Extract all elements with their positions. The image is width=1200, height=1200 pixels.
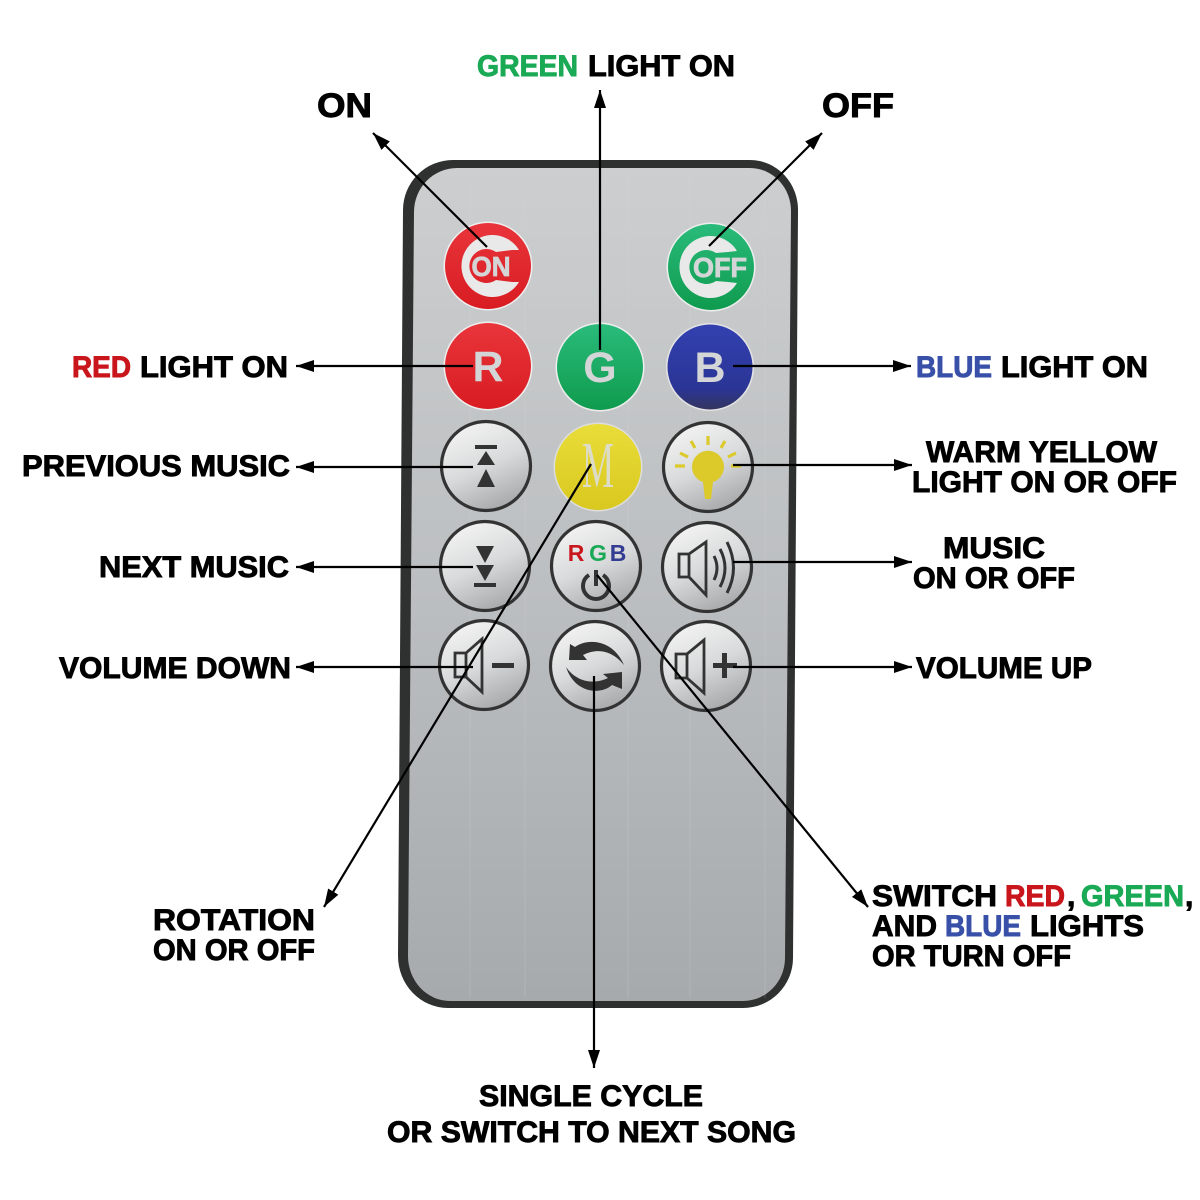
button: RGB power: G [589,540,607,566]
arrow: off [709,133,822,246]
label: green light on [477,50,735,83]
label: off: OFF [822,87,894,125]
label: switch rgb lights: GREEN [1081,880,1184,913]
label: music on or off: MUSIC [943,532,1045,565]
label: music on or off [913,532,1075,595]
label: single cycle [387,1080,796,1149]
label: red light on: LIGHT ON [140,351,288,384]
label: previous music: PREVIOUS MUSIC [22,450,290,483]
label: warm yellow light: LIGHT ON OR OFF [912,466,1177,499]
label: green light on: GREEN [477,50,578,83]
button: ON: ON [472,251,510,282]
button: single cycle [550,622,640,710]
label: switch rgb lights: BLUE [945,910,1021,943]
arrow: next music [296,566,473,568]
label: rotation on or off: ON OR OFF [153,934,315,967]
button: RGB power: B [610,540,626,566]
arrow: red [296,365,473,367]
remote control body [398,160,798,1008]
label: rotation on or off [153,904,315,967]
button: warm yellow light [664,422,752,512]
button: B: B [694,344,726,392]
arrow: single cycle [593,676,595,1068]
label: blue light on: BLUE [916,351,992,384]
label: blue light on [916,351,1148,384]
button: next music [440,522,530,610]
button: OFF [666,222,756,312]
label: volume up: VOLUME UP [916,652,1092,685]
label: warm yellow light [912,436,1177,499]
label: single cycle: OR SWITCH TO NEXT SONG [387,1116,796,1149]
label: switch rgb lights: SWITCH [872,880,997,913]
label: switch rgb lights: AND [872,910,937,943]
arrow: warm yellow [733,464,912,466]
button: RGB power [552,522,640,610]
arrow: rotation [324,464,591,907]
label: warm yellow light: WARM YELLOW [926,436,1158,469]
label: red light on [72,351,288,384]
label: on: ON [317,87,372,125]
label: next music: NEXT MUSIC [99,551,289,584]
button: previous music [442,422,530,510]
label: volume down: VOLUME DOWN [59,652,291,685]
arrow: volume up [733,666,912,668]
arrow: green [599,90,601,350]
button: B [666,323,754,411]
button: R: R [472,343,504,391]
button: RGB power: R [568,540,585,566]
label: switch rgb lights: , [1185,880,1193,913]
arrow: rgb switch [597,575,868,907]
button: volume up [662,622,750,710]
button: M [554,422,642,512]
arrow: volume down [296,666,473,668]
label: red light on: RED [72,351,131,384]
button: M: M [582,429,614,502]
button: G: G [583,344,617,392]
label: switch rgb lights: OR TURN OFF [872,940,1071,973]
button: music on or off [662,522,752,612]
label: green light on: LIGHT ON [588,50,735,83]
arrow: on [373,133,487,247]
label: single cycle: SINGLE CYCLE [479,1080,703,1113]
button: OFF: OFF [693,252,747,283]
label: blue light on: LIGHT ON [1001,351,1148,384]
button: volume down [440,620,528,710]
label: switch rgb lights: LIGHTS [1030,910,1144,943]
arrow: blue [733,365,911,367]
label: switch rgb lights: , [1067,880,1075,913]
label: switch rgb lights [872,880,1193,973]
label: music on or off: ON OR OFF [913,562,1075,595]
button: G [556,322,644,412]
button: ON [444,222,532,310]
arrow: previous music [296,466,473,468]
button: R [444,322,532,410]
arrow: music on or off [733,561,912,563]
label: switch rgb lights: RED [1005,880,1065,913]
label: rotation on or off: ROTATION [153,904,315,937]
